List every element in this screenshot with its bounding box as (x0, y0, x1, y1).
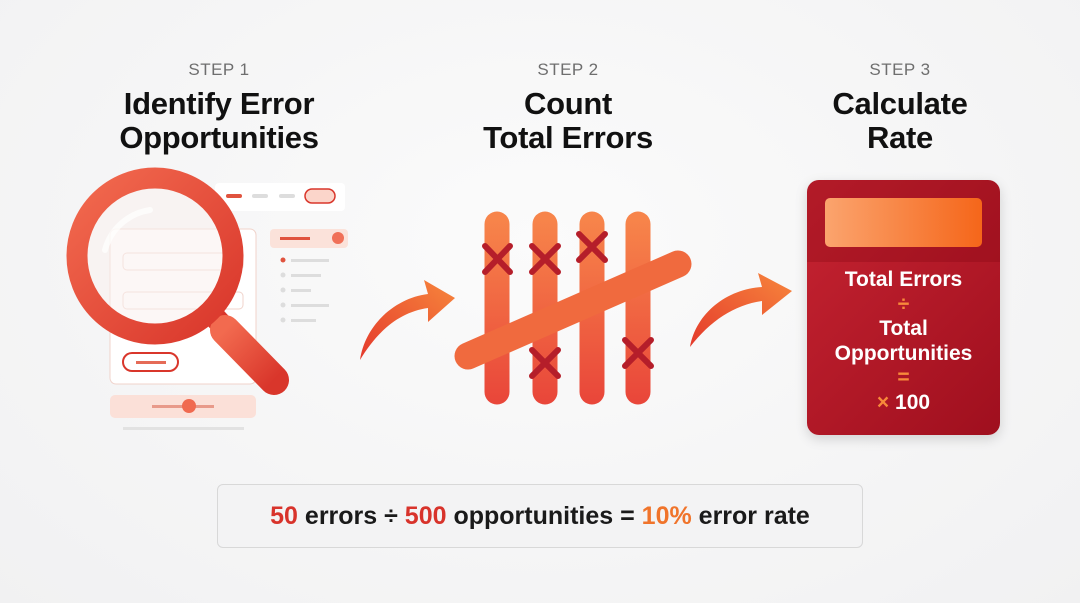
arrow 2 (690, 273, 792, 347)
formula text: Total Errors (845, 268, 962, 291)
step 3 heading: Rate (867, 120, 933, 155)
formula text: Total (879, 317, 928, 340)
step 2 heading: STEP 2 (537, 60, 599, 79)
tally marks icon (454, 212, 692, 404)
step 2 heading: Count (524, 86, 612, 121)
example calculation box (217, 484, 863, 548)
step 3 heading: STEP 3 (869, 60, 931, 79)
top toolbar card (215, 183, 345, 211)
formula text (835, 268, 972, 414)
magnifier (77, 178, 274, 380)
arrow 1 (360, 280, 455, 360)
step 1 heading (119, 60, 319, 155)
formula text: × 100 (877, 390, 930, 414)
side list (270, 229, 348, 322)
step 2 heading (483, 60, 653, 155)
screen (825, 198, 982, 247)
example calculation box: 50 errors ÷ 500 opportunities = 10% error rate (270, 502, 810, 530)
calculator formula card (807, 180, 1000, 435)
formula text: ÷ (898, 292, 909, 316)
step 1 heading: Identify Error (124, 86, 314, 121)
step 3 heading (832, 60, 968, 155)
step 1 heading: STEP 1 (188, 60, 250, 79)
step 2 heading: Total Errors (483, 120, 653, 155)
formula text: = (897, 366, 910, 389)
formula text: Opportunities (835, 342, 972, 364)
bottom slider (110, 395, 256, 430)
step 1 heading: Opportunities (119, 120, 319, 155)
form card (110, 229, 256, 384)
step 3 heading: Calculate (832, 86, 968, 121)
